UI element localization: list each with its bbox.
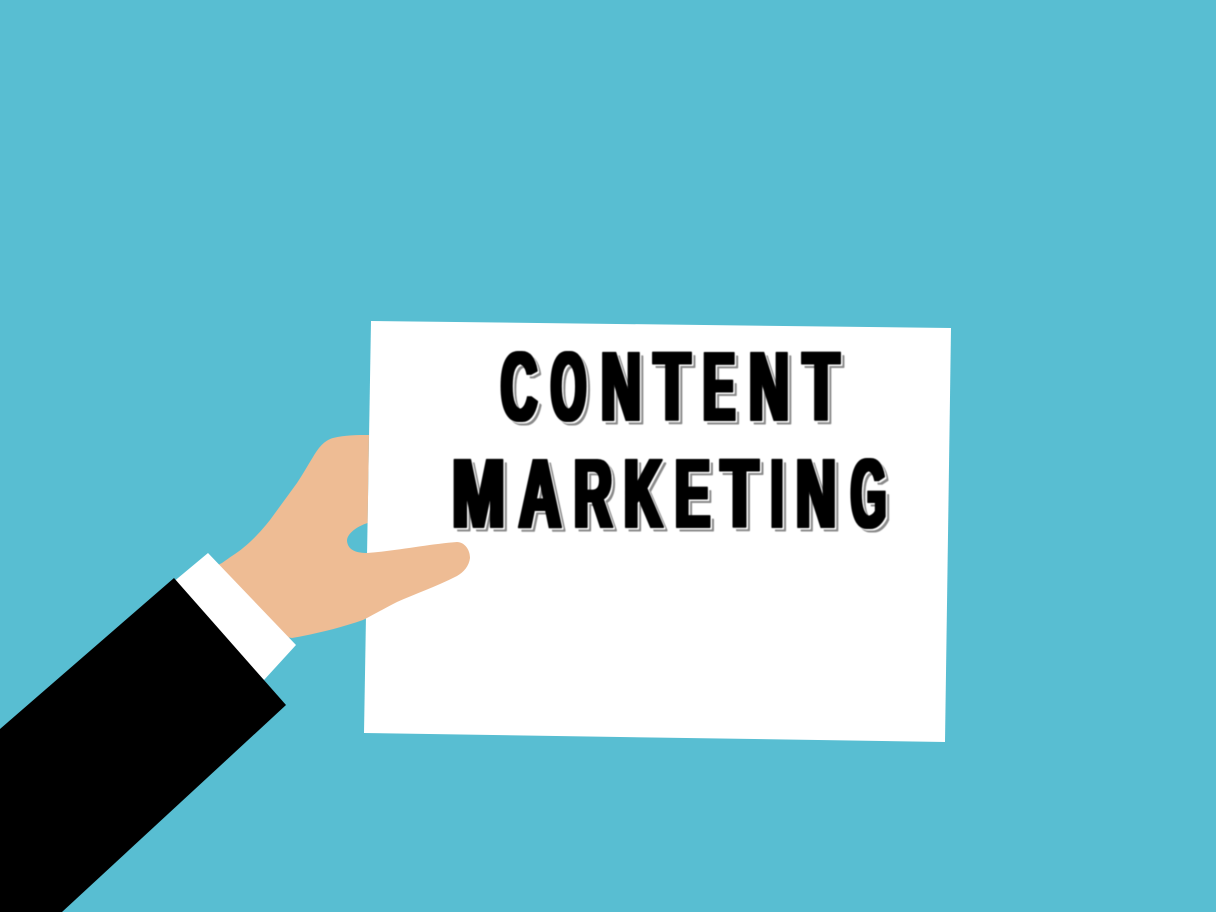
hand with thumb over the sign — [218, 435, 470, 638]
heading: content: T — [654, 332, 690, 441]
shirt cuff — [172, 553, 296, 680]
heading: content: O — [551, 332, 586, 441]
heading: content: C — [501, 332, 537, 441]
heading: marketing: E — [675, 439, 710, 548]
heading: content: T — [803, 332, 839, 441]
illustration: hand holding a content marketing sign: G — [851, 439, 886, 548]
heading: content: N — [601, 332, 641, 441]
heading: content: N — [749, 332, 789, 441]
heading: marketing: R — [574, 439, 612, 548]
heading: marketing: A — [519, 439, 561, 548]
heading: marketing: M — [452, 439, 505, 548]
suit sleeve — [0, 578, 286, 912]
heading: content: E — [703, 332, 735, 441]
heading: content — [501, 332, 839, 441]
heading: marketing — [452, 439, 886, 548]
heading: marketing: K — [624, 439, 662, 548]
heading: marketing: I — [771, 439, 783, 548]
heading: marketing: N — [796, 439, 836, 548]
white paper sign — [364, 321, 951, 742]
heading: marketing: T — [721, 439, 758, 548]
